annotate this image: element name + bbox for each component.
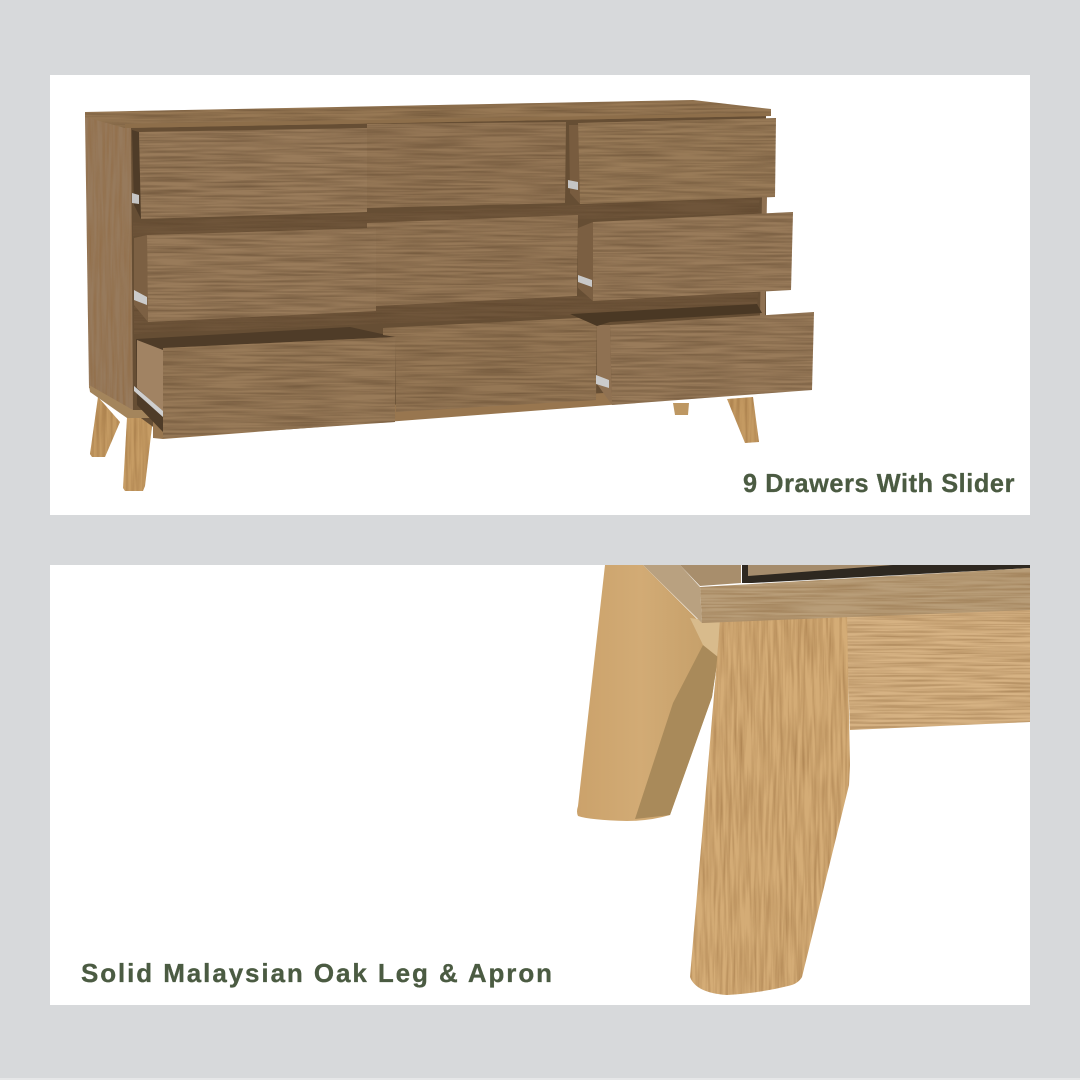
back leg [577,565,718,821]
upper block [680,565,741,586]
leg: back right [673,403,689,415]
carcass interior [129,114,766,432]
leg: front left [123,418,153,491]
carcass rail: lower [134,293,758,334]
panel: solid oak leg close-up [50,565,1030,1005]
drawer slider: top right [568,180,578,190]
drawer slider: middle right [578,275,592,287]
drawer front: middle center [367,215,578,306]
drawer front: middle left [147,228,376,322]
drawer slider: bottom right [596,375,609,388]
rail side [643,565,702,623]
base apron [153,392,622,439]
drawer: bottom right box [597,325,612,405]
panel: dresser with drawers open [50,75,1030,515]
drawer: bottom center [383,317,597,412]
caption: 9 drawers with slider: 9 Drawers With Slider [743,468,1015,498]
drawer front: top left [139,128,367,219]
front leg [690,614,850,995]
drawer slider: bottom left [134,386,163,417]
drawer box: top left [132,130,141,219]
drawer bottom edge [748,565,893,576]
drawer front: bottom right [610,312,814,405]
rail front [700,568,1030,623]
drawer box: middle left [134,235,148,322]
carcass rail: upper [133,198,760,236]
drawer box: top right [569,125,580,204]
drawer: bottom left box [136,327,396,432]
bottom edge strip [0,1078,1080,1080]
right side edge of carcass [760,196,767,316]
leg: front right [727,397,759,443]
caption: solid Malaysian oak leg and apron: Solid Malaysian Oak Leg & Apron [81,958,553,988]
illustration: nine drawer dresser [85,100,814,491]
drawer front: bottom left [163,337,396,438]
drawer front: middle right [593,212,793,301]
leg: back left [90,397,120,457]
back leg shadow [635,645,718,819]
bottom base front [89,385,160,425]
drawer front: top center [367,122,566,208]
drawer box: middle right [578,222,593,301]
drawer slider: middle left [134,290,147,305]
drawer front: top right [578,118,776,204]
top board [85,100,771,128]
connector under rail [690,618,722,657]
drawer slider: top left [132,193,139,204]
apron [846,606,1030,730]
illustration: leg and apron close-up [577,565,1030,995]
dark drawer gap [742,565,1030,583]
side panel [85,115,133,412]
